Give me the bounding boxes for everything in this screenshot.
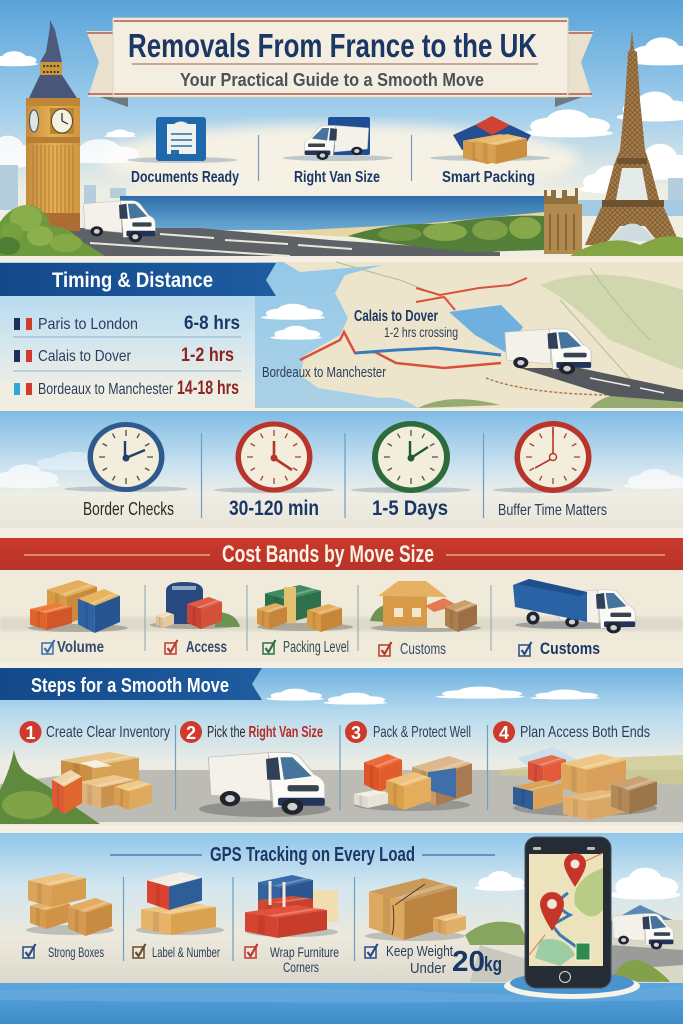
tip: keep weight under 20kg: Under xyxy=(410,960,446,977)
clock: border checks xyxy=(64,422,188,519)
route row: paris to london: Paris to London xyxy=(38,316,138,333)
right landscape xyxy=(465,868,683,982)
route row: bordeaux to manchester: Bordeaux to Manchester xyxy=(38,381,174,398)
heading banner xyxy=(0,668,262,700)
clock: 1-5 days: 1-5 Days xyxy=(372,497,448,520)
heading banner xyxy=(0,538,683,570)
title ribbon xyxy=(86,18,594,107)
step 3 xyxy=(345,721,472,811)
map pins xyxy=(564,853,586,887)
road xyxy=(70,228,500,256)
distant skyline xyxy=(0,165,683,210)
clock: border checks: Border Checks xyxy=(83,499,174,519)
feature: documents ready xyxy=(127,117,239,186)
step 2 xyxy=(180,721,331,817)
van xyxy=(199,753,331,817)
eiffel tower xyxy=(585,30,680,245)
tree xyxy=(0,750,100,824)
tip: keep weight under 20kg xyxy=(365,878,502,978)
white van on road xyxy=(83,201,155,242)
left trees xyxy=(0,205,105,256)
clock face xyxy=(50,108,74,134)
step 4: Plan Access Both Ends xyxy=(520,724,650,741)
tip: keep weight under 20kg: kg xyxy=(484,954,502,976)
tip: wrap furniture corners: Corners xyxy=(283,959,319,975)
cost: customs (house): Customs xyxy=(400,641,446,658)
cost: access: Access xyxy=(186,639,227,656)
step 1 xyxy=(0,721,170,824)
step 4: 4 xyxy=(499,723,509,743)
routes xyxy=(300,332,501,368)
cost: volume xyxy=(28,580,128,656)
step 1: Create Clear Inventory xyxy=(46,724,170,741)
clock: buffer time matters: Buffer Time Matters xyxy=(498,502,607,519)
van xyxy=(505,329,591,375)
cost: packing level xyxy=(257,585,353,656)
boxes xyxy=(354,754,472,811)
step 2: Pick the Right Van Size xyxy=(207,724,323,741)
route row: calais to dover: 1-2 hrs xyxy=(181,345,234,366)
road xyxy=(520,368,683,402)
cost: customs (truck): Customs xyxy=(540,639,600,658)
feature: smart packing: Smart Packing xyxy=(442,169,535,186)
clock: buffer time matters xyxy=(493,421,613,519)
subtitle: Your Practical Guide to a Smooth Move xyxy=(180,70,484,90)
route row: calais to dover xyxy=(14,345,234,366)
feature: right van size xyxy=(283,117,393,186)
panel: cost bands: Cost Bands by Move Size xyxy=(222,541,434,568)
cost: packing level: Packing Level xyxy=(283,639,349,656)
panel: gps tracking xyxy=(0,833,683,983)
map: 1-2 hrs crossing xyxy=(384,324,458,340)
panel: clocks xyxy=(0,411,683,528)
map xyxy=(255,262,683,408)
cost: customs (house) xyxy=(370,581,481,658)
feature: documents ready: Documents Ready xyxy=(131,169,239,186)
route row: calais to dover: Calais to Dover xyxy=(38,348,132,365)
tip: wrap furniture corners: Wrap Furniture xyxy=(270,944,339,960)
panel: steps: Steps for a Smooth Move xyxy=(31,675,229,697)
heading banner xyxy=(0,263,276,296)
step 2: 2 xyxy=(186,723,196,743)
right trees xyxy=(348,216,683,256)
feature: smart packing xyxy=(430,116,550,186)
heading: GPS Tracking on Every Load xyxy=(210,844,415,866)
tip: keep weight under 20kg: 20 xyxy=(452,946,485,978)
tip: label and number: Label & Number xyxy=(152,944,220,960)
clock: 1-5 days xyxy=(351,421,471,520)
map labels: Calais to Dover xyxy=(354,308,438,325)
tip: strong boxes xyxy=(23,873,114,960)
phone screen xyxy=(529,853,603,966)
sea xyxy=(120,196,550,230)
step 1: 1 xyxy=(25,723,36,743)
boxes and house xyxy=(513,747,657,820)
tip: strong boxes: Strong Boxes xyxy=(48,944,104,960)
boxes xyxy=(52,752,152,814)
cost: customs (truck) xyxy=(513,579,635,658)
step 3: 3 xyxy=(351,723,361,743)
hero section: landmarks and title xyxy=(0,0,683,256)
feature: right van size: Right Van Size xyxy=(294,169,380,186)
gothic building xyxy=(544,188,582,254)
clock: 30-120 min xyxy=(214,422,334,520)
phone with map xyxy=(504,837,640,999)
panel: timing and distance xyxy=(0,262,683,408)
icon: document xyxy=(127,117,237,163)
big ben tower xyxy=(26,20,80,231)
cost: volume: Volume xyxy=(57,639,104,656)
step 4 xyxy=(493,721,657,820)
icon: boxes xyxy=(430,116,550,164)
cost: access xyxy=(150,582,240,656)
panel: cost bands xyxy=(0,538,683,662)
step 3: Pack & Protect Well xyxy=(373,724,471,741)
sand xyxy=(265,212,560,240)
panel: steps xyxy=(0,668,683,825)
clouds xyxy=(0,37,683,193)
tip: wrap furniture corners xyxy=(245,875,339,975)
route row: bordeaux to manchester xyxy=(14,378,239,399)
icon: van xyxy=(283,117,393,161)
panel: timing and distance: Timing & Distance xyxy=(52,269,213,292)
tip: keep weight under 20kg: Keep Weight xyxy=(386,943,454,960)
route row: paris to london: 6-8 hrs xyxy=(184,313,240,334)
footer band xyxy=(0,983,683,1024)
clock: 30-120 min: 30-120 min xyxy=(229,497,319,520)
map: Bordeaux to Manchester xyxy=(262,365,386,381)
route row: paris to london xyxy=(14,313,240,334)
tip: label and number xyxy=(133,872,224,960)
title: Removals From France to the UK xyxy=(128,27,537,64)
route row: bordeaux to manchester: 14-18 hrs xyxy=(177,378,239,399)
